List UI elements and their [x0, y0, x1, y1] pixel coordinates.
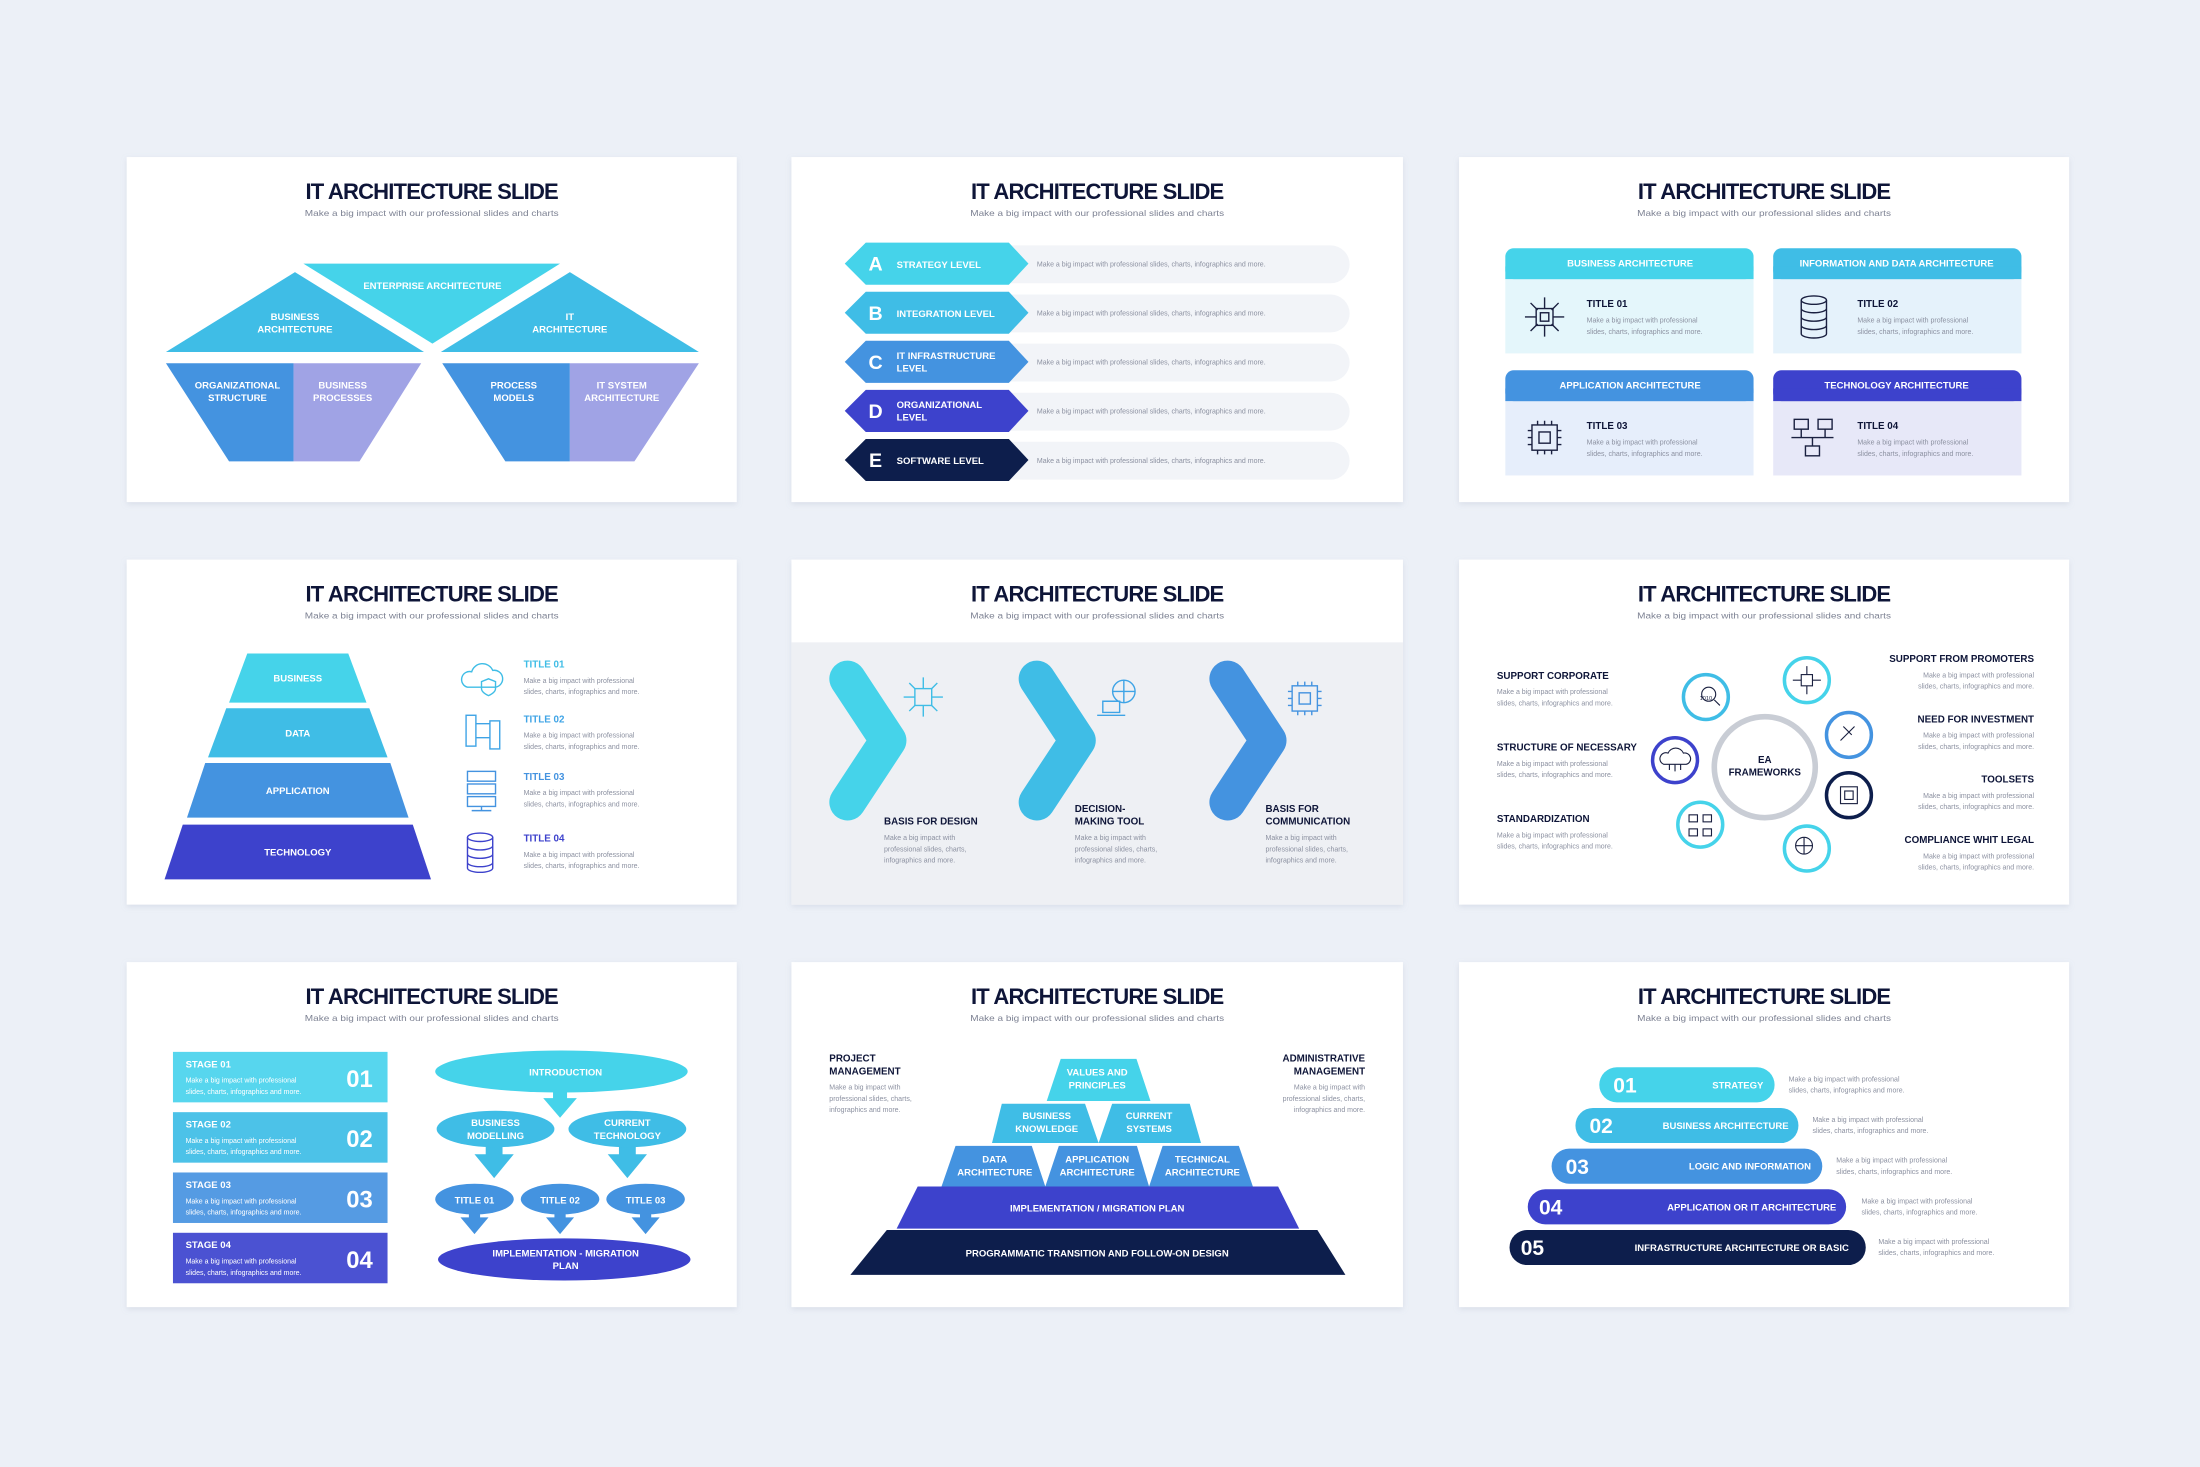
stage boxes: STAGE 03 — [186, 1180, 231, 1191]
card: business architecture: slides, charts, infographics and more. — [1587, 329, 1703, 336]
row E: Make a big impact with professional slides, charts, infographics and more. — [1037, 458, 1266, 465]
row A — [845, 243, 1350, 285]
panel: pentagon architecture — [127, 157, 737, 502]
side text: administrative management: MANAGEMENT — [1294, 1066, 1365, 1077]
shape: enterprise architecture: ENTERPRISE ARCHITECTURE — [363, 281, 502, 292]
item list with icons: slides, charts, infographics and more. — [524, 863, 640, 870]
row A: A — [869, 254, 883, 276]
shape: right trapezoid: IT SYSTEM — [597, 380, 647, 391]
title: Make a big impact with our professional slides and charts — [1637, 1013, 1892, 1023]
title: Make a big impact with our professional slides and charts — [1637, 208, 1892, 218]
stage boxes — [173, 1052, 388, 1283]
left labels: slides, charts, infographics and more. — [1497, 844, 1613, 851]
pills: 01 — [1613, 1075, 1637, 1098]
title: IT ARCHITECTURE SLIDE — [305, 582, 559, 607]
center circle: FRAMEWORKS — [1729, 768, 1801, 779]
right labels: Make a big impact with professional — [1923, 793, 2034, 800]
title: Make a big impact with our professional slides and charts — [305, 1013, 559, 1023]
pills: INFRASTRUCTURE ARCHITECTURE OR BASIC — [1635, 1243, 1849, 1254]
pills: BUSINESS ARCHITECTURE — [1663, 1121, 1789, 1132]
step 1: infographics and more. — [884, 858, 955, 865]
side text: administrative management: Make a big impact with — [1294, 1085, 1365, 1092]
side text: project management — [829, 1054, 912, 1114]
card: technology architecture: TITLE 04 — [1857, 421, 1899, 432]
side text: project management: infographics and more. — [829, 1107, 901, 1114]
item list with icons: TITLE 01 — [524, 660, 565, 671]
left labels: STRUCTURE OF NECESSARY — [1497, 742, 1637, 753]
flowchart: IMPLEMENTATION - MIGRATION — [492, 1249, 639, 1260]
card: technology architecture: Make a big impact with professional — [1857, 440, 1969, 447]
row C: IT INFRASTRUCTURE — [897, 351, 995, 362]
stage boxes: slides, charts, infographics and more. — [186, 1270, 302, 1277]
title: Make a big impact with our professional slides and charts — [305, 610, 559, 620]
left labels: Make a big impact with professional — [1497, 761, 1608, 768]
pills: slides, charts, infographics and more. — [1862, 1210, 1978, 1217]
right labels: slides, charts, infographics and more. — [1918, 804, 2034, 811]
title: Make a big impact with our professional slides and charts — [970, 610, 1225, 620]
flowchart: INTRODUCTION — [529, 1068, 602, 1079]
title — [970, 179, 1225, 218]
title: IT ARCHITECTURE SLIDE — [1638, 179, 1891, 204]
item list with icons: TITLE 02 — [524, 714, 565, 725]
step 3: BASIS FOR — [1265, 804, 1319, 815]
title: IT ARCHITECTURE SLIDE — [1638, 984, 1891, 1009]
panel: layer pyramid — [127, 560, 737, 905]
title: IT ARCHITECTURE SLIDE — [971, 582, 1224, 607]
title: IT ARCHITECTURE SLIDE — [1638, 582, 1891, 607]
shape: business architecture: BUSINESS — [271, 312, 319, 323]
stage boxes: Make a big impact with professional — [186, 1259, 297, 1266]
stage boxes: slides, charts, infographics and more. — [186, 1210, 302, 1217]
shape: business architecture — [166, 272, 424, 352]
pyramid blocks: PROGRAMMATIC TRANSITION AND FOLLOW-ON DESIGN — [966, 1249, 1229, 1260]
icon circles: 1010 — [1700, 696, 1712, 702]
item list with icons: Make a big impact with professional — [524, 733, 635, 740]
pills: Make a big impact with professional — [1812, 1117, 1924, 1124]
card: application architecture: Make a big impact with professional — [1587, 440, 1698, 447]
stage boxes: Make a big impact with professional — [186, 1138, 297, 1145]
shape: right trapezoid: PROCESS — [490, 380, 537, 391]
row A: Make a big impact with professional slides, charts, infographics and more. — [1037, 261, 1266, 268]
panel: EA frameworks — [1459, 560, 2069, 905]
stage boxes: 02 — [346, 1126, 373, 1153]
title — [305, 984, 559, 1023]
row D — [845, 390, 1350, 432]
row D: D — [869, 401, 883, 423]
row E — [845, 439, 1350, 481]
pills: slides, charts, infographics and more. — [1878, 1250, 1994, 1257]
left labels: SUPPORT CORPORATE — [1497, 671, 1609, 682]
step 2: Make a big impact with — [1075, 835, 1146, 842]
flowchart: CURRENT — [604, 1118, 651, 1129]
card: business architecture: TITLE 01 — [1587, 299, 1628, 310]
card: business architecture — [1505, 248, 1754, 353]
left labels: Make a big impact with professional — [1497, 689, 1608, 696]
title — [305, 582, 559, 620]
shape: right trapezoid — [442, 363, 699, 461]
pyramid blocks: DATA — [982, 1155, 1007, 1166]
pyramid blocks — [850, 1059, 1345, 1275]
center circle: EA — [1758, 755, 1772, 766]
title: Make a big impact with our professional slides and charts — [970, 1013, 1225, 1023]
shape: left trapezoid: STRUCTURE — [208, 393, 267, 404]
flowchart: MODELLING — [467, 1131, 524, 1142]
left labels: slides, charts, infographics and more. — [1497, 772, 1613, 779]
shape: right trapezoid: ARCHITECTURE — [584, 393, 659, 404]
flowchart — [435, 1050, 690, 1280]
stage boxes: STAGE 04 — [186, 1240, 232, 1251]
side text: project management: PROJECT — [829, 1054, 876, 1065]
pyramid layers — [165, 654, 431, 879]
title — [1637, 179, 1892, 218]
flowchart: BUSINESS — [471, 1118, 520, 1129]
right labels: NEED FOR INVESTMENT — [1918, 714, 2034, 725]
flowchart: TECHNOLOGY — [594, 1131, 662, 1142]
center circle — [1714, 717, 1815, 818]
pills: Make a big impact with professional — [1789, 1076, 1900, 1083]
title: IT ARCHITECTURE SLIDE — [971, 179, 1224, 204]
card: information and data architecture: Make a big impact with professional — [1857, 318, 1969, 325]
step 1: BASIS FOR DESIGN — [884, 817, 978, 828]
right labels: slides, charts, infographics and more. — [1918, 865, 2034, 872]
pills — [1510, 1067, 1994, 1265]
pyramid layers: BUSINESS — [273, 674, 322, 685]
right labels: TOOLSETS — [1981, 775, 2035, 786]
step 2 — [1037, 679, 1157, 865]
pyramid blocks: VALUES AND — [1067, 1068, 1128, 1079]
card: information and data architecture — [1773, 248, 2021, 353]
right labels: slides, charts, infographics and more. — [1918, 684, 2034, 691]
row B: INTEGRATION LEVEL — [897, 309, 995, 320]
side text: administrative management: professional slides, charts, — [1283, 1096, 1365, 1103]
side text: project management: MANAGEMENT — [829, 1066, 901, 1077]
flowchart: TITLE 03 — [626, 1195, 665, 1206]
pills: 02 — [1589, 1115, 1613, 1138]
right labels — [1889, 654, 2035, 872]
side text: administrative management: infographics and more. — [1294, 1107, 1365, 1114]
card: application architecture: TITLE 03 — [1587, 421, 1628, 432]
stage boxes: Make a big impact with professional — [186, 1198, 297, 1205]
left labels: slides, charts, infographics and more. — [1497, 700, 1613, 707]
pills: APPLICATION OR IT ARCHITECTURE — [1667, 1202, 1836, 1213]
icon circles — [1653, 658, 1871, 871]
pills: Make a big impact with professional — [1878, 1239, 1990, 1246]
title: Make a big impact with our professional slides and charts — [305, 208, 559, 218]
pyramid blocks: ARCHITECTURE — [957, 1167, 1032, 1178]
stage boxes: Make a big impact with professional — [186, 1078, 297, 1085]
panel: stages and flowchart — [127, 962, 737, 1307]
row B — [845, 292, 1350, 334]
row C: LEVEL — [897, 364, 927, 375]
step 2: DECISION- — [1075, 804, 1125, 815]
stage boxes: 03 — [346, 1187, 373, 1214]
title: IT ARCHITECTURE SLIDE — [305, 179, 559, 204]
shape: left trapezoid: ORGANIZATIONAL — [195, 380, 280, 391]
side text: administrative management: ADMINISTRATIVE — [1283, 1054, 1366, 1065]
item list with icons: slides, charts, infographics and more. — [524, 801, 640, 808]
pills: 03 — [1566, 1156, 1589, 1179]
title — [305, 179, 559, 218]
step 2: professional slides, charts, — [1075, 846, 1157, 853]
panel: numbered pills — [1459, 962, 2069, 1307]
stage boxes: 01 — [346, 1066, 373, 1093]
card: technology architecture: slides, charts, infographics and more. — [1857, 451, 1973, 458]
shape: enterprise architecture — [303, 264, 560, 344]
pyramid blocks: ARCHITECTURE — [1165, 1167, 1240, 1178]
step 3: COMMUNICATION — [1265, 817, 1350, 828]
shape: right trapezoid: MODELS — [493, 393, 534, 404]
pyramid blocks: ARCHITECTURE — [1060, 1167, 1135, 1178]
title — [970, 984, 1225, 1023]
shape: it architecture: ARCHITECTURE — [532, 324, 607, 335]
card: application architecture: APPLICATION ARCHITECTURE — [1560, 380, 1701, 391]
pyramid blocks: IMPLEMENTATION / MIGRATION PLAN — [1010, 1204, 1185, 1215]
panel: architecture cards — [1459, 157, 2069, 502]
right labels: SUPPORT FROM PROMOTERS — [1889, 654, 2035, 665]
step 3: professional slides, charts, — [1265, 846, 1348, 853]
card: business architecture: Make a big impact with professional — [1587, 318, 1698, 325]
stage boxes: 04 — [346, 1247, 373, 1274]
card: technology architecture: TECHNOLOGY ARCHITECTURE — [1824, 380, 1969, 391]
side text: project management: professional slides, charts, — [829, 1096, 912, 1103]
step 2: infographics and more. — [1075, 858, 1146, 865]
stage boxes: slides, charts, infographics and more. — [186, 1089, 302, 1096]
pills: Make a big impact with professional — [1862, 1198, 1973, 1205]
side text: project management: Make a big impact with — [829, 1085, 901, 1092]
title — [970, 582, 1225, 620]
card: information and data architecture: slides, charts, infographics and more. — [1857, 329, 1973, 336]
step 1: professional slides, charts, — [884, 846, 967, 853]
row C: C — [869, 352, 883, 374]
step 1 — [848, 677, 978, 865]
shape: left trapezoid: PROCESSES — [313, 393, 372, 404]
left labels — [1497, 671, 1637, 851]
shape: it architecture — [441, 272, 699, 352]
right labels: Make a big impact with professional — [1923, 733, 2034, 740]
pills: LOGIC AND INFORMATION — [1689, 1162, 1811, 1173]
title: IT ARCHITECTURE SLIDE — [971, 984, 1224, 1009]
row C — [845, 341, 1350, 383]
card: information and data architecture: INFORMATION AND DATA ARCHITECTURE — [1800, 258, 1994, 269]
pyramid blocks: TECHNICAL — [1175, 1155, 1230, 1166]
pyramid layers: APPLICATION — [266, 786, 330, 797]
pills: STRATEGY — [1712, 1080, 1764, 1091]
item list with icons: TITLE 03 — [524, 772, 565, 783]
row D: LEVEL — [897, 413, 927, 424]
stage boxes: STAGE 01 — [186, 1059, 232, 1070]
side text: administrative management — [1283, 1054, 1366, 1114]
pills: Make a big impact with professional — [1836, 1158, 1948, 1165]
pyramid blocks: CURRENT — [1126, 1111, 1173, 1122]
item list with icons: Make a big impact with professional — [524, 790, 635, 797]
step 3: infographics and more. — [1265, 858, 1337, 865]
title — [1637, 582, 1892, 620]
row A: STRATEGY LEVEL — [897, 260, 981, 271]
shape: left trapezoid — [166, 363, 421, 461]
pyramid blocks: BUSINESS — [1022, 1111, 1071, 1122]
pyramid layers: DATA — [285, 728, 310, 739]
card: application architecture: slides, charts, infographics and more. — [1587, 451, 1703, 458]
right labels: Make a big impact with professional — [1923, 853, 2034, 860]
card: information and data architecture: TITLE 02 — [1857, 299, 1899, 310]
shape: business architecture: ARCHITECTURE — [257, 324, 333, 335]
pyramid layers: TECHNOLOGY — [264, 848, 332, 859]
item list with icons: slides, charts, infographics and more. — [524, 744, 640, 751]
title: Make a big impact with our professional slides and charts — [1637, 610, 1892, 620]
panel: chevrons — [791, 560, 1403, 905]
pills: 05 — [1521, 1237, 1544, 1260]
row C: Make a big impact with professional slides, charts, infographics and more. — [1037, 360, 1266, 367]
step 3 — [1228, 679, 1350, 865]
right labels: slides, charts, infographics and more. — [1918, 744, 2034, 751]
panel: levels A-E — [791, 157, 1403, 502]
left labels: STANDARDIZATION — [1497, 814, 1590, 825]
flowchart: PLAN — [553, 1261, 579, 1272]
row B: Make a big impact with professional slides, charts, infographics and more. — [1037, 311, 1266, 318]
pills: 04 — [1539, 1197, 1563, 1220]
row D: ORGANIZATIONAL — [897, 400, 982, 411]
flowchart: TITLE 01 — [455, 1195, 495, 1206]
title — [1637, 984, 1892, 1023]
step 1: Make a big impact with — [884, 835, 955, 842]
item list with icons: slides, charts, infographics and more. — [524, 689, 640, 696]
row D: Make a big impact with professional slides, charts, infographics and more. — [1037, 409, 1266, 416]
left labels: Make a big impact with professional — [1497, 832, 1608, 839]
flowchart: TITLE 02 — [540, 1195, 580, 1206]
shape: left trapezoid: BUSINESS — [318, 380, 367, 391]
stage boxes: slides, charts, infographics and more. — [186, 1149, 302, 1156]
pyramid blocks: KNOWLEDGE — [1015, 1124, 1078, 1135]
pyramid blocks: APPLICATION — [1065, 1155, 1129, 1166]
pyramid blocks: PRINCIPLES — [1069, 1080, 1126, 1091]
item list with icons: TITLE 04 — [524, 833, 565, 844]
item list with icons: Make a big impact with professional — [524, 852, 635, 859]
card: business architecture: BUSINESS ARCHITECTURE — [1567, 258, 1693, 269]
panel: architecture pyramid — [791, 962, 1403, 1307]
row E: E — [869, 450, 882, 472]
item list with icons — [462, 660, 640, 872]
title: Make a big impact with our professional slides and charts — [970, 208, 1225, 218]
stage boxes: STAGE 02 — [186, 1120, 231, 1131]
pills: slides, charts, infographics and more. — [1812, 1128, 1928, 1135]
pills: slides, charts, infographics and more. — [1836, 1169, 1952, 1176]
shape: it architecture: IT — [566, 312, 574, 323]
right labels: Make a big impact with professional — [1923, 672, 2034, 679]
card: technology architecture — [1773, 370, 2021, 475]
right labels: COMPLIANCE WHIT LEGAL — [1905, 835, 2034, 846]
item list with icons: Make a big impact with professional — [524, 678, 635, 685]
step 2: MAKING TOOL — [1075, 817, 1144, 828]
card: application architecture — [1505, 370, 1754, 475]
pyramid blocks: SYSTEMS — [1126, 1124, 1172, 1135]
step 3: Make a big impact with — [1265, 835, 1337, 842]
row E: SOFTWARE LEVEL — [897, 456, 984, 467]
row B: B — [869, 303, 883, 325]
pills: slides, charts, infographics and more. — [1789, 1088, 1905, 1095]
title: IT ARCHITECTURE SLIDE — [305, 984, 559, 1009]
